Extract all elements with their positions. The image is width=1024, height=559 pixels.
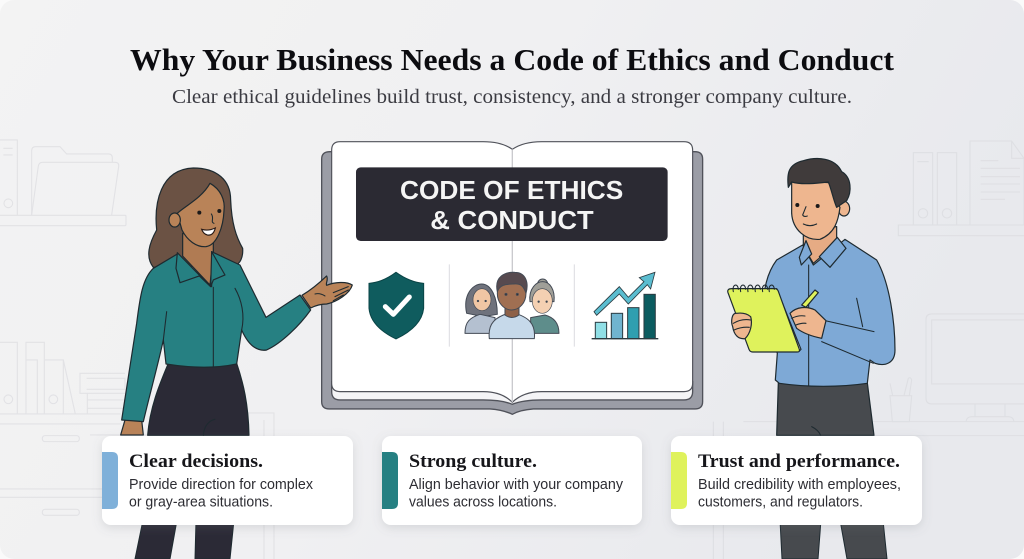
card: trust and performance: Build credibility with employees,: [698, 477, 901, 493]
top pages: [332, 142, 693, 402]
notepad: [728, 285, 801, 352]
title banner: CODE OF ETHICS: [400, 175, 623, 205]
hair: [788, 159, 850, 207]
pants: [148, 363, 249, 435]
background office: left shelves and drawers: [0, 140, 274, 559]
card: strong culture: Strong culture.: [409, 452, 537, 472]
card: strong culture: Align behavior with your company: [409, 477, 624, 493]
collar: [799, 237, 846, 267]
green blouse: [122, 252, 311, 422]
woman presenting: [121, 168, 352, 435]
background office: right shelves, monitor and desk: [713, 141, 1024, 559]
blouse collar: [176, 252, 225, 287]
pen: [802, 290, 818, 307]
ear: [838, 201, 850, 216]
left sleeve and hand: [121, 420, 143, 435]
man with notepad: [728, 159, 895, 435]
face: [177, 183, 224, 247]
card: clear decisions: or gray-area situations.: [129, 494, 273, 510]
lower page stack: [332, 382, 693, 404]
icon: shield with check: [369, 272, 424, 339]
face: [792, 182, 840, 239]
card: clear decisions: Provide direction for complex: [129, 477, 314, 493]
title banner: [356, 167, 668, 241]
title banner: & CONDUCT: [430, 205, 594, 235]
title: Why Your Business Needs a Code of Ethics and Conduct: [130, 42, 895, 77]
pants: [777, 383, 874, 435]
open book: [322, 142, 703, 414]
icon: group of people: [465, 272, 559, 339]
left hand: [732, 313, 751, 339]
neck: [803, 227, 837, 263]
hand: [302, 276, 352, 308]
hair: [149, 168, 243, 267]
neck: [183, 233, 213, 285]
icon: growth chart: [592, 272, 658, 339]
card: clear decisions: [102, 436, 353, 525]
subtitle: Clear ethical guidelines build trust, consistency, and a stronger company culture.: [172, 86, 852, 108]
card: trust and performance: Trust and performance.: [698, 452, 900, 472]
man legs below card: [780, 520, 887, 559]
blue shirt: [763, 239, 895, 386]
card: strong culture: [382, 436, 642, 525]
book cover: [322, 152, 703, 414]
card: trust and performance: [671, 436, 922, 525]
woman legs below card: [135, 520, 234, 559]
card: clear decisions: Clear decisions.: [129, 452, 263, 472]
card: trust and performance: customers, and regulators.: [698, 494, 863, 510]
card: strong culture: values across locations.: [409, 494, 557, 510]
right hand and cuff: [790, 308, 826, 338]
